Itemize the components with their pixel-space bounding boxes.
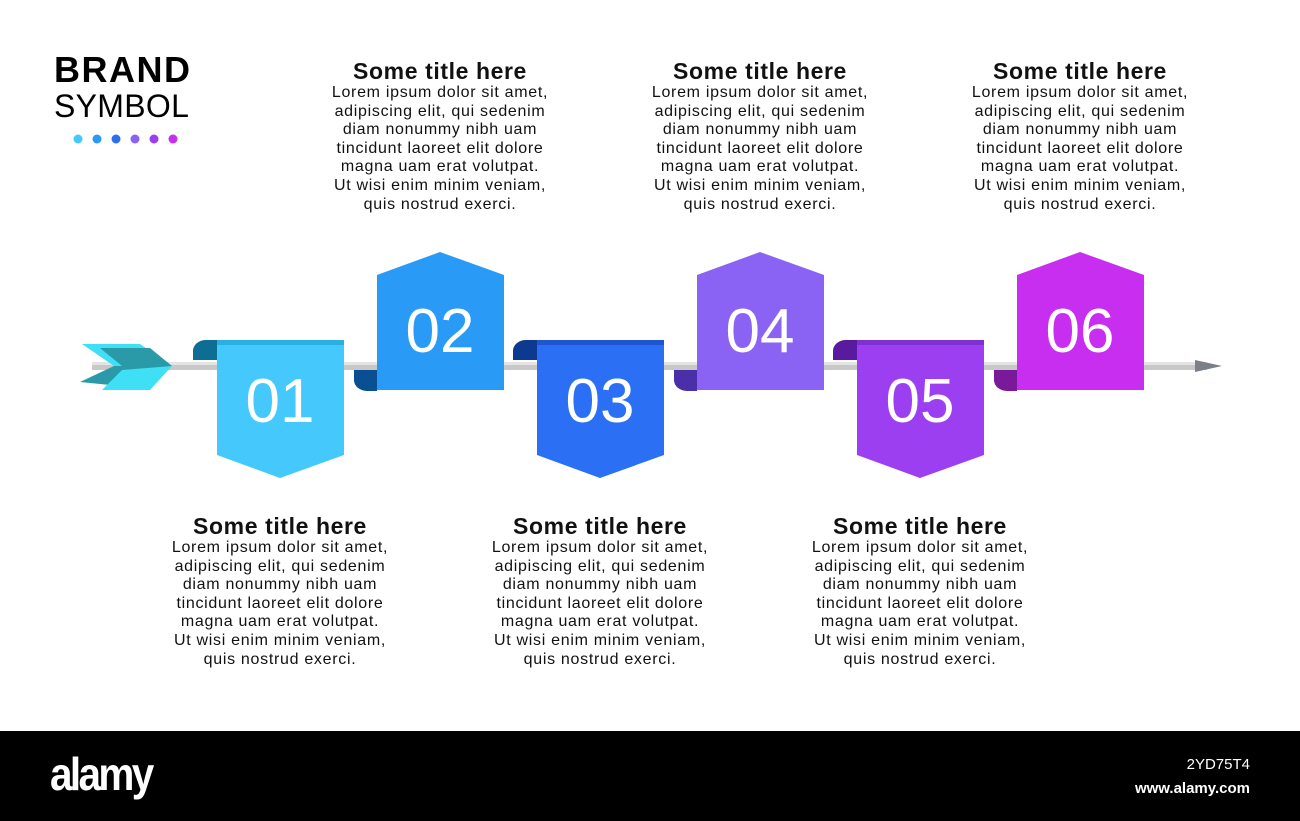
text block 02: adipiscing elit, qui sedenim: [335, 103, 545, 120]
arrow shaft: [92, 360, 1222, 372]
text block 06: quis nostrud exerci.: [1004, 196, 1156, 213]
text block 02: Some title here: [353, 58, 527, 84]
text block 06: adipiscing elit, qui sedenim: [975, 103, 1185, 120]
text block 04: magna uam erat volutpat.: [661, 158, 859, 175]
text block 02: quis nostrud exerci.: [364, 196, 516, 213]
text block 02: Lorem ipsum dolor sit amet,: [332, 84, 548, 101]
text block 06: Lorem ipsum dolor sit amet,: [972, 84, 1188, 101]
text block 01: diam nonummy nibh uam: [183, 576, 377, 593]
brand logo: [54, 49, 192, 144]
text block 03: Ut wisi enim minim veniam,: [494, 632, 706, 649]
text block 06: magna uam erat volutpat.: [981, 158, 1179, 175]
badge 05: [833, 340, 984, 478]
text block 02: magna uam erat volutpat.: [341, 158, 539, 175]
text block 02: [332, 58, 548, 213]
text block 04: Lorem ipsum dolor sit amet,: [652, 84, 868, 101]
text block 05: tincidunt laoreet elit dolore: [816, 595, 1024, 612]
badge 04: [674, 252, 824, 391]
text block 04: Some title here: [673, 58, 847, 84]
text block 05: magna uam erat volutpat.: [821, 613, 1019, 630]
footer bar: 2YD75T4: [1187, 756, 1250, 773]
text block 03: magna uam erat volutpat.: [501, 613, 699, 630]
text block 05: Some title here: [833, 513, 1007, 539]
text block 05: diam nonummy nibh uam: [823, 576, 1017, 593]
text block 01: [172, 513, 388, 668]
text block 04: quis nostrud exerci.: [684, 196, 836, 213]
text block 03: tincidunt laoreet elit dolore: [496, 595, 704, 612]
text block 03: [492, 513, 708, 668]
text block 03: adipiscing elit, qui sedenim: [495, 558, 705, 575]
text block 01: quis nostrud exerci.: [204, 651, 356, 668]
text block 02: tincidunt laoreet elit dolore: [336, 140, 544, 157]
badge 05: 05: [886, 367, 954, 436]
footer bar: [0, 731, 1300, 821]
footer bar: alamy: [50, 748, 152, 800]
text block 06: tincidunt laoreet elit dolore: [976, 140, 1184, 157]
text block 04: Ut wisi enim minim veniam,: [654, 177, 866, 194]
text block 05: Ut wisi enim minim veniam,: [814, 632, 1026, 649]
brand logo: SYMBOL: [54, 88, 189, 124]
text block 02: Ut wisi enim minim veniam,: [334, 177, 546, 194]
text block 05: quis nostrud exerci.: [844, 651, 996, 668]
badge 01: 01: [246, 367, 314, 436]
text block 06: Ut wisi enim minim veniam,: [974, 177, 1186, 194]
text block 04: tincidunt laoreet elit dolore: [656, 140, 864, 157]
text block 06: [972, 58, 1188, 213]
badge 02: 02: [406, 297, 474, 366]
badge 02: [354, 252, 504, 391]
footer bar: www.alamy.com: [1135, 780, 1250, 797]
text block 01: adipiscing elit, qui sedenim: [175, 558, 385, 575]
text block 03: quis nostrud exerci.: [524, 651, 676, 668]
text block 06: Some title here: [993, 58, 1167, 84]
text block 04: diam nonummy nibh uam: [663, 121, 857, 138]
badge 03: [513, 340, 664, 478]
badge 04: 04: [726, 297, 794, 366]
text block 01: magna uam erat volutpat.: [181, 613, 379, 630]
text block 05: [812, 513, 1028, 668]
text block 04: adipiscing elit, qui sedenim: [655, 103, 865, 120]
brand logo: BRAND: [54, 49, 192, 90]
text block 02: diam nonummy nibh uam: [343, 121, 537, 138]
badge 06: [994, 252, 1144, 391]
text block 01: tincidunt laoreet elit dolore: [176, 595, 384, 612]
text block 03: diam nonummy nibh uam: [503, 576, 697, 593]
badge 03: 03: [566, 367, 634, 436]
text block 03: Some title here: [513, 513, 687, 539]
badge 01: [193, 340, 344, 478]
badge 06: 06: [1046, 297, 1114, 366]
text block 01: Some title here: [193, 513, 367, 539]
text block 03: Lorem ipsum dolor sit amet,: [492, 539, 708, 556]
icon: arrow fletching: [80, 344, 172, 390]
text block 01: Lorem ipsum dolor sit amet,: [172, 539, 388, 556]
text block 04: [652, 58, 868, 213]
text block 05: adipiscing elit, qui sedenim: [815, 558, 1025, 575]
text block 06: diam nonummy nibh uam: [983, 121, 1177, 138]
text block 01: Ut wisi enim minim veniam,: [174, 632, 386, 649]
text block 05: Lorem ipsum dolor sit amet,: [812, 539, 1028, 556]
